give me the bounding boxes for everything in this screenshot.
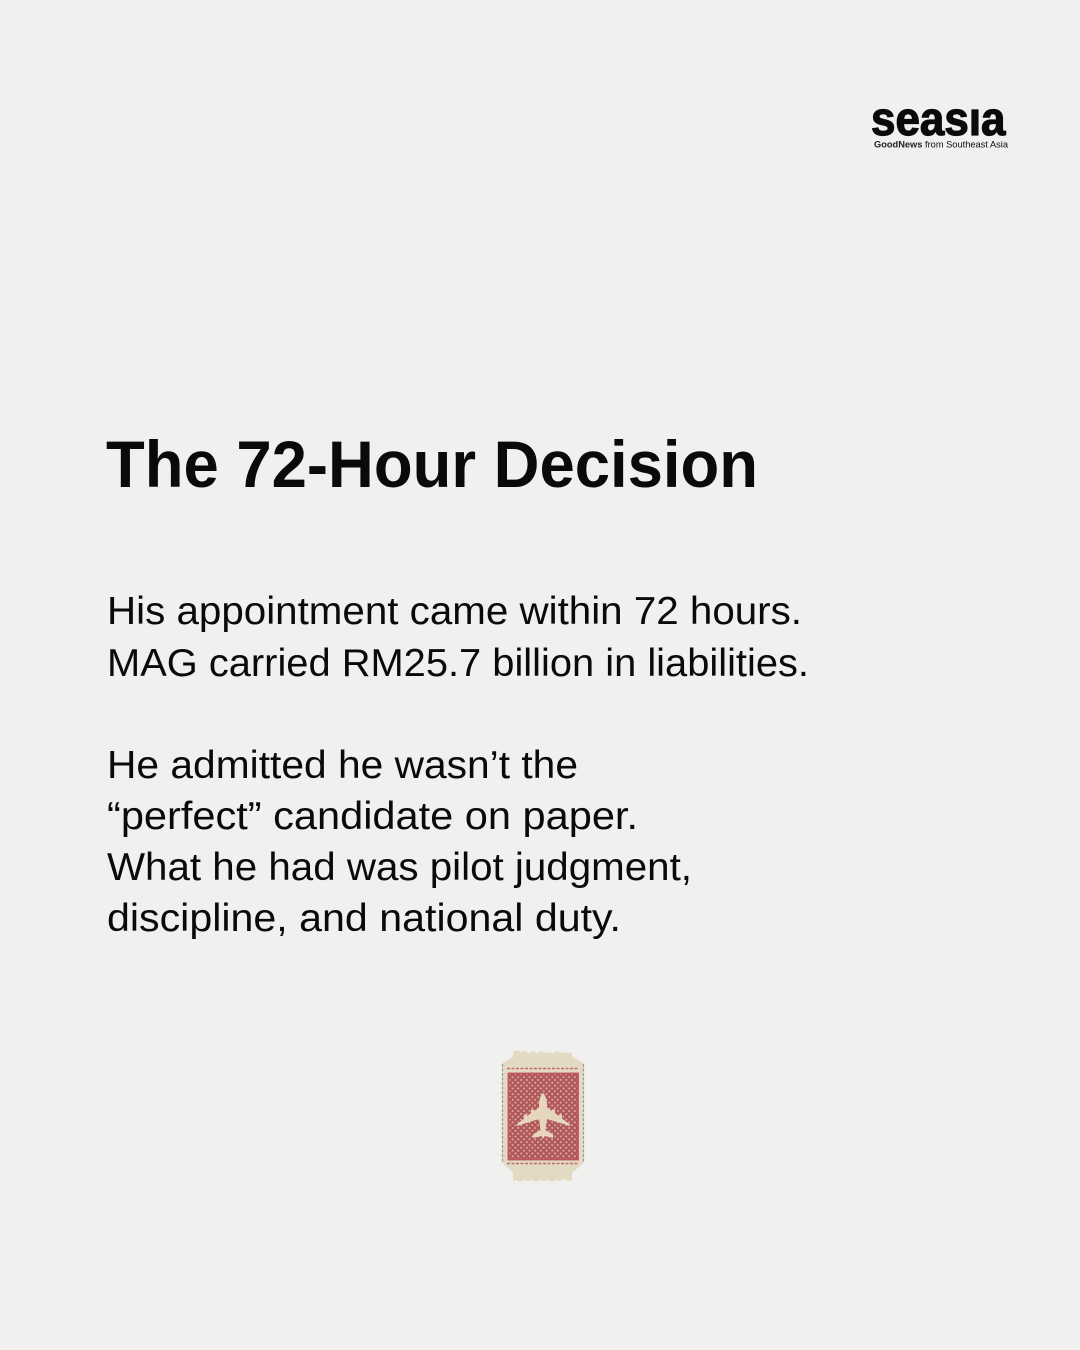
text block: candidate qualities: discipline, and national duty. bbox=[107, 897, 621, 940]
logo tagline: GoodNews from Southeast Asia bbox=[874, 140, 1009, 150]
logo: seasia bbox=[872, 108, 1008, 148]
airplane bbox=[517, 1093, 570, 1139]
logo wordmark: seasia bbox=[871, 92, 1006, 145]
stamp paper bbox=[502, 1050, 584, 1182]
text block: candidate qualities bbox=[107, 744, 692, 940]
text block: appointment and liabilities: MAG carried RM25.7 billion in liabilities. bbox=[107, 642, 809, 685]
text block: appointment and liabilities: His appointment came within 72 hours. bbox=[107, 590, 802, 633]
text block: candidate qualities: He admitted he wasn’t the bbox=[107, 744, 578, 787]
text block: candidate qualities: What he had was pilot judgment, bbox=[107, 846, 692, 889]
icon: airplane postage stamp bbox=[502, 1050, 584, 1182]
stamp perforated edges bbox=[502, 1064, 584, 1163]
stamp dashed rules bbox=[507, 1068, 578, 1164]
title: The 72-Hour Decision bbox=[106, 427, 758, 501]
text block: appointment and liabilities bbox=[107, 590, 809, 685]
stamp red panel bbox=[508, 1074, 578, 1160]
text block: candidate qualities: “perfect” candidate on paper. bbox=[107, 795, 638, 838]
